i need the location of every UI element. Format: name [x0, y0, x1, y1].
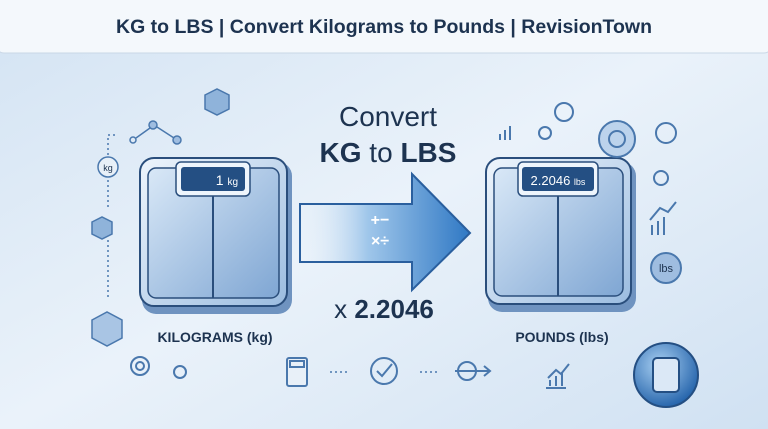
right decorative icons: lbs [659, 263, 674, 275]
scale: pounds: 2.2046 lbs [531, 173, 586, 188]
icon: checkmark [371, 358, 397, 384]
right decorative icons [500, 103, 681, 283]
icon: arrow globe [458, 362, 476, 380]
icon: math operators: +− [371, 212, 389, 229]
scale: pounds [486, 158, 636, 312]
label: kilograms: KILOGRAMS (kg) [157, 329, 273, 345]
title: KG to LBS | Convert Kilograms to Pounds | RevisionTown [116, 16, 652, 38]
bottom icons row [131, 357, 569, 388]
left decorative icons: kg [103, 163, 113, 173]
icon: calculator [287, 358, 307, 386]
heading: Convert KG to LBS [320, 101, 456, 168]
display: 1 kg [181, 167, 245, 191]
left decorative icons [92, 89, 229, 346]
heading: Convert KG to LBS: Convert [339, 101, 437, 132]
display: 2.2046 lbs [522, 167, 594, 191]
scale: kilograms: 1 kg [216, 172, 238, 188]
heading: Convert KG to LBS: KG to LBS [320, 137, 456, 168]
multiplier text: x 2.2046 [334, 294, 434, 324]
arrow [300, 174, 470, 290]
scale: kilograms [140, 158, 292, 314]
icon: globe with scale [634, 343, 698, 407]
icon: chart [546, 364, 569, 388]
label: pounds: POUNDS (lbs) [515, 329, 609, 345]
arrow: ×÷ [371, 233, 389, 250]
header bar [0, 0, 768, 53]
